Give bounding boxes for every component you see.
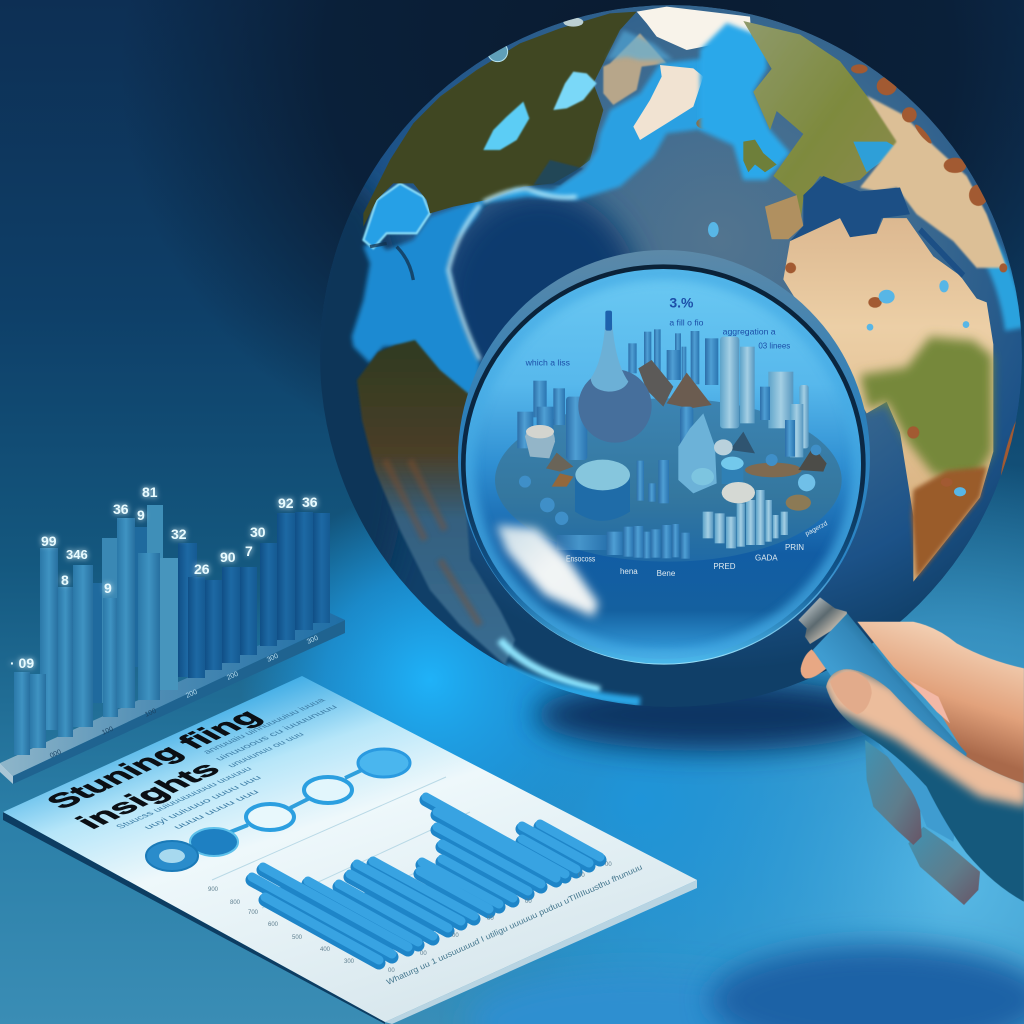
open ring — [246, 804, 294, 830]
light bars — [14, 505, 178, 755]
lens labels: 3.% — [669, 294, 694, 310]
lower scale labels: pagerzd — [804, 520, 829, 538]
lower scale labels: PRIN — [785, 543, 804, 552]
bar value labels: 90 — [220, 549, 236, 565]
magnifying glass lens — [458, 250, 870, 667]
rocks — [546, 453, 573, 472]
left towers — [517, 381, 565, 448]
iberia — [765, 195, 803, 239]
back of hand — [857, 622, 1024, 793]
chart axis labels: 00 — [578, 873, 585, 879]
bar value labels: 8 — [61, 572, 69, 588]
platform labels: 300 — [306, 635, 320, 646]
lower scale labels: GADA — [755, 554, 778, 563]
large drum — [575, 460, 630, 521]
filled ring — [358, 749, 410, 777]
polar ice — [637, 7, 752, 50]
globe — [290, 5, 1022, 707]
chart axis labels — [208, 862, 612, 974]
hand holding handle — [798, 597, 1024, 905]
chart axis labels: 900 — [208, 887, 219, 893]
chart axis labels: 700 — [248, 910, 259, 916]
bar value labels: 26 — [194, 561, 210, 577]
chart axis labels: 300 — [344, 959, 355, 965]
document body text: uinuuoous cu iuuuunuuu — [213, 703, 340, 762]
middle east — [860, 96, 1007, 268]
chart axis labels: 400 — [320, 947, 331, 953]
platform labels: 100 — [144, 708, 158, 719]
document sheet — [3, 676, 697, 1024]
bar value labels: 30 — [250, 524, 266, 540]
glass glare — [497, 525, 598, 617]
western continents and shelf — [352, 7, 752, 400]
bay — [553, 72, 597, 110]
africa south — [912, 467, 987, 578]
front centre bars — [557, 524, 690, 559]
deep Atlantic basin — [450, 184, 646, 366]
eastern continents — [700, 21, 1021, 582]
north atlantic shelf — [480, 57, 720, 203]
africa — [783, 218, 993, 582]
chart axis labels: 00 — [525, 899, 532, 905]
dark bay detail — [370, 243, 413, 280]
platform — [0, 613, 345, 784]
document title — [36, 706, 303, 833]
caribbean shelf — [352, 197, 487, 400]
greenland — [633, 65, 703, 140]
mid tower group — [637, 460, 669, 503]
mediterranean — [790, 176, 910, 241]
blue markers — [708, 222, 969, 496]
mountains — [638, 360, 673, 407]
rear fingertip — [801, 649, 828, 679]
document title: insights — [69, 758, 228, 833]
bar value labels: 7 — [245, 543, 253, 559]
bar value labels: 92 — [278, 495, 294, 511]
open ring — [304, 777, 352, 803]
lens inner dark ring — [463, 267, 863, 661]
palm gap — [908, 680, 950, 723]
platform labels: 100 — [101, 726, 115, 737]
progress rings — [146, 749, 410, 871]
miniature landscape disk — [495, 398, 842, 562]
crystal figure — [678, 407, 744, 493]
north sea — [700, 23, 790, 180]
front right bars — [703, 490, 788, 548]
chart grid lines — [212, 777, 605, 963]
platform labels — [49, 635, 320, 760]
globe shadow on floor — [535, 679, 895, 751]
platform labels: 200 — [185, 689, 199, 700]
document bar chart — [252, 797, 600, 963]
edge light — [467, 272, 860, 658]
africa green belt — [860, 337, 992, 482]
south america — [357, 340, 515, 665]
arctic islands — [603, 33, 667, 105]
sphere with spire — [578, 311, 652, 443]
document body text: uuyi uuiuuuo uuuu uuu — [141, 774, 264, 831]
lower finger — [908, 827, 980, 905]
bar value labels: 346 — [66, 547, 88, 562]
document body text — [78, 697, 389, 844]
bar value labels: · 09 — [10, 655, 34, 671]
chart axis labels: 00 — [388, 968, 395, 974]
chart axis labels: 00 — [420, 951, 427, 957]
lower scale labels: hena — [620, 567, 638, 576]
document body text: Stuucss uuiuuuuuuuuu uuuuuu — [113, 765, 254, 830]
chart axis labels: 600 — [268, 922, 279, 928]
metal collar — [798, 597, 848, 644]
small blue spheres — [519, 445, 821, 525]
lower scale labels: Ensocoss — [566, 555, 595, 564]
curled finger — [865, 740, 922, 845]
cap on rim — [563, 17, 583, 27]
lower scale labels — [566, 520, 829, 578]
bar value labels: 9 — [137, 507, 145, 523]
dome rock — [525, 425, 555, 458]
tall right towers — [720, 337, 809, 457]
bar value labels: 81 — [142, 484, 158, 500]
indian ocean band — [985, 230, 1021, 333]
lens glass — [460, 263, 870, 667]
lower scale labels: PRED — [713, 562, 736, 571]
europe — [743, 21, 897, 216]
bubble on rim — [488, 46, 508, 62]
lens labels — [525, 294, 790, 367]
north american land — [363, 12, 637, 227]
background towers — [628, 329, 718, 385]
lens labels: 03 linees — [758, 342, 790, 351]
bar value labels: 99 — [41, 533, 57, 549]
chart axis labels: 00 — [452, 933, 459, 939]
lower scale labels: Bene — [657, 569, 676, 578]
red sea — [920, 230, 963, 276]
document body text: uuuu uuuu uuu — [171, 788, 261, 830]
bottom coast glow — [500, 640, 600, 690]
double badge — [190, 828, 238, 856]
document body text: unuuunuu ou uuu — [225, 731, 306, 769]
bar value labels: 36 — [302, 494, 318, 510]
document body text: annuuaiu uinnuuuuiuu iuuua — [200, 697, 327, 755]
black sea — [853, 142, 894, 172]
dark bars — [178, 512, 330, 678]
bar value labels: 9 — [104, 580, 112, 596]
back bar chart — [0, 484, 345, 784]
chart axis labels: 00 — [605, 862, 612, 868]
small island — [696, 118, 705, 129]
lake — [483, 102, 529, 150]
index finger and wrist — [820, 663, 1024, 903]
chart axis labels: 00 — [487, 916, 494, 922]
shell dome — [722, 482, 755, 503]
bar value labels: 32 — [171, 526, 187, 542]
bar value labels: 36 — [113, 501, 129, 517]
british isles — [743, 140, 777, 172]
platform labels: 300 — [266, 653, 280, 664]
chart axis labels: 500 — [292, 935, 303, 941]
bar value labels — [10, 484, 318, 671]
platform labels: 000 — [49, 749, 63, 760]
gulf — [363, 183, 430, 248]
lens labels: which a liss — [525, 357, 571, 367]
bright coast line — [448, 188, 577, 360]
handle — [813, 613, 967, 842]
platform labels: 200 — [226, 671, 240, 682]
document title: Stuning fiing — [39, 706, 269, 813]
floor glow under globe — [240, 490, 620, 870]
chart axis labels: 800 — [230, 900, 241, 906]
lens labels: a fill o fio — [669, 317, 704, 327]
lens labels: aggregation a — [723, 327, 776, 337]
lens rim — [458, 250, 870, 665]
rocky edge clusters — [785, 64, 1021, 487]
chart footnote: Whaturg uu 1 uusuuuuud I utiligu uuuuuu puduu uTIIIIIuusthu fhunuuu — [385, 863, 644, 987]
